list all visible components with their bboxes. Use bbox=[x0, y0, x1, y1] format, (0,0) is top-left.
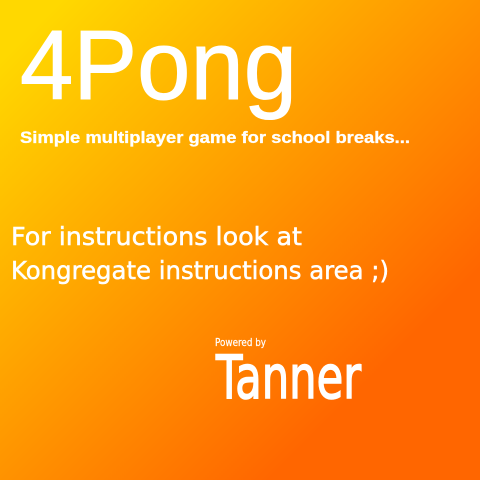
instructions line 1: For instructions look at bbox=[11, 222, 302, 251]
title: 4Pong bbox=[20, 10, 297, 120]
subtitle: Simple multiplayer game for school breaks... bbox=[20, 129, 410, 147]
Tanner logo text: Tanner bbox=[215, 343, 361, 413]
credit: powered by Tanner bbox=[215, 336, 361, 413]
powered by label: Powered by bbox=[215, 336, 266, 349]
instructions text bbox=[11, 222, 389, 285]
instructions line 2: Kongregate instructions area ;) bbox=[11, 256, 389, 285]
